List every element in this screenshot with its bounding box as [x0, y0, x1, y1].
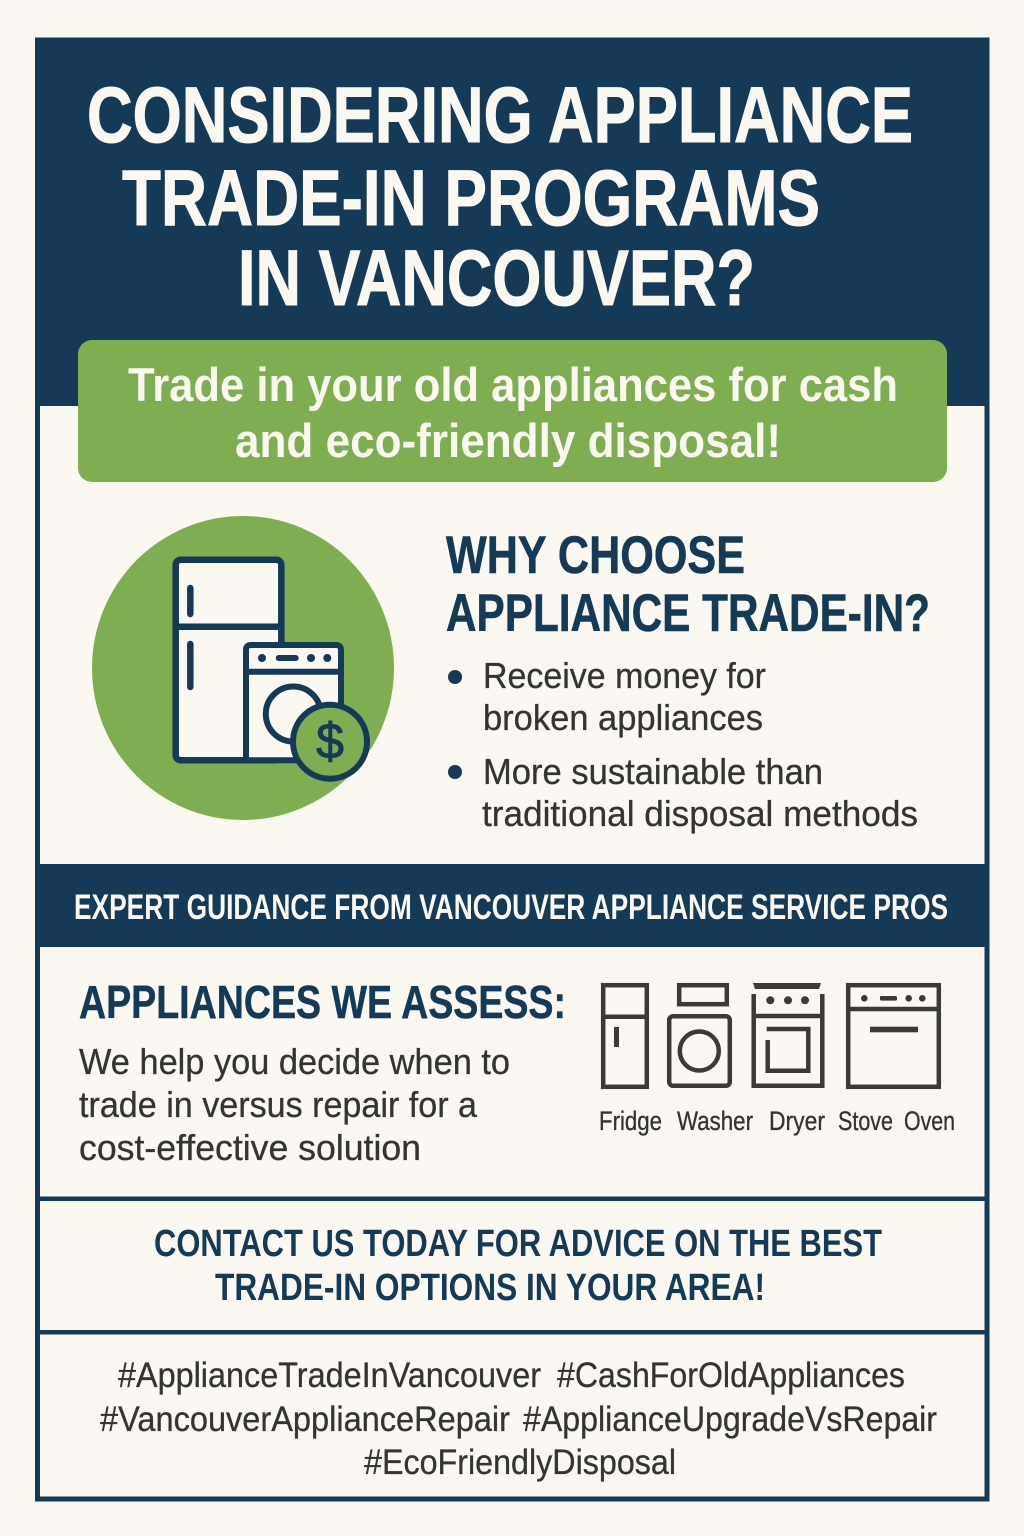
icon: dollar coin: [293, 705, 367, 779]
icon: oven outline: [848, 985, 939, 1087]
icon: washer outline: [669, 985, 730, 1086]
appliance icon row: [599, 983, 955, 1136]
hashtags: #CashForOldAppliances: [557, 1356, 905, 1395]
assess description: We help you decide when to: [79, 1041, 510, 1082]
icon: dryer outline: [753, 983, 822, 1086]
icon labels: Oven: [904, 1106, 955, 1136]
assess description: trade in versus repair for a: [79, 1084, 478, 1125]
why choose heading: WHY CHOOSE: [446, 526, 745, 585]
icon labels: [599, 1106, 955, 1136]
assess heading: APPLIANCES WE ASSESS:: [79, 976, 566, 1028]
assess description: cost-effective solution: [79, 1127, 421, 1168]
bullet: receive money: Receive money for: [483, 655, 766, 696]
expert guidance band: [35, 864, 989, 947]
bullet: receive money: [448, 655, 766, 738]
hashtags: #ApplianceUpgradeVsRepair: [523, 1400, 937, 1439]
bullet: more sustainable: [448, 751, 918, 834]
icon labels: Washer: [677, 1106, 753, 1136]
icon labels: Dryer: [769, 1106, 825, 1136]
bullet: more sustainable: More sustainable than: [483, 751, 823, 792]
why choose section: [446, 526, 930, 834]
icon: fridge and washer with dollar coin on green circle: [92, 516, 394, 820]
title: TRADE-IN PROGRAMS: [122, 153, 820, 242]
header panel: [35, 38, 989, 406]
icon labels: Fridge: [599, 1106, 662, 1136]
contact call to action: [154, 1223, 882, 1309]
green subtitle banner: Trade in your old appliances for cash: [128, 358, 898, 411]
icon: fridge: [176, 560, 281, 760]
title: IN VANCOUVER?: [238, 233, 755, 322]
icon: washer: [246, 645, 341, 760]
appliances we assess text: [79, 976, 566, 1168]
title: [87, 70, 913, 322]
bullet: more sustainable: traditional disposal methods: [482, 793, 918, 834]
assess description: [79, 1041, 510, 1168]
hashtags: #VancouverApplianceRepair: [100, 1400, 510, 1439]
icon labels: Stove: [838, 1106, 893, 1136]
hashtags: #EcoFriendlyDisposal: [364, 1443, 676, 1482]
icon: dollar coin: $: [316, 713, 344, 769]
green subtitle banner: [78, 340, 947, 482]
bullet: receive money: broken appliances: [483, 697, 763, 738]
icon: fridge outline: [603, 985, 647, 1087]
hashtags: [100, 1356, 937, 1482]
contact call to action: TRADE-IN OPTIONS IN YOUR AREA!: [215, 1267, 765, 1309]
green subtitle banner: and eco-friendly disposal!: [235, 414, 781, 467]
hashtags: #ApplianceTradeInVancouver: [118, 1356, 541, 1395]
why choose heading: [446, 526, 930, 643]
contact call to action: CONTACT US TODAY FOR ADVICE ON THE BEST: [154, 1223, 882, 1265]
